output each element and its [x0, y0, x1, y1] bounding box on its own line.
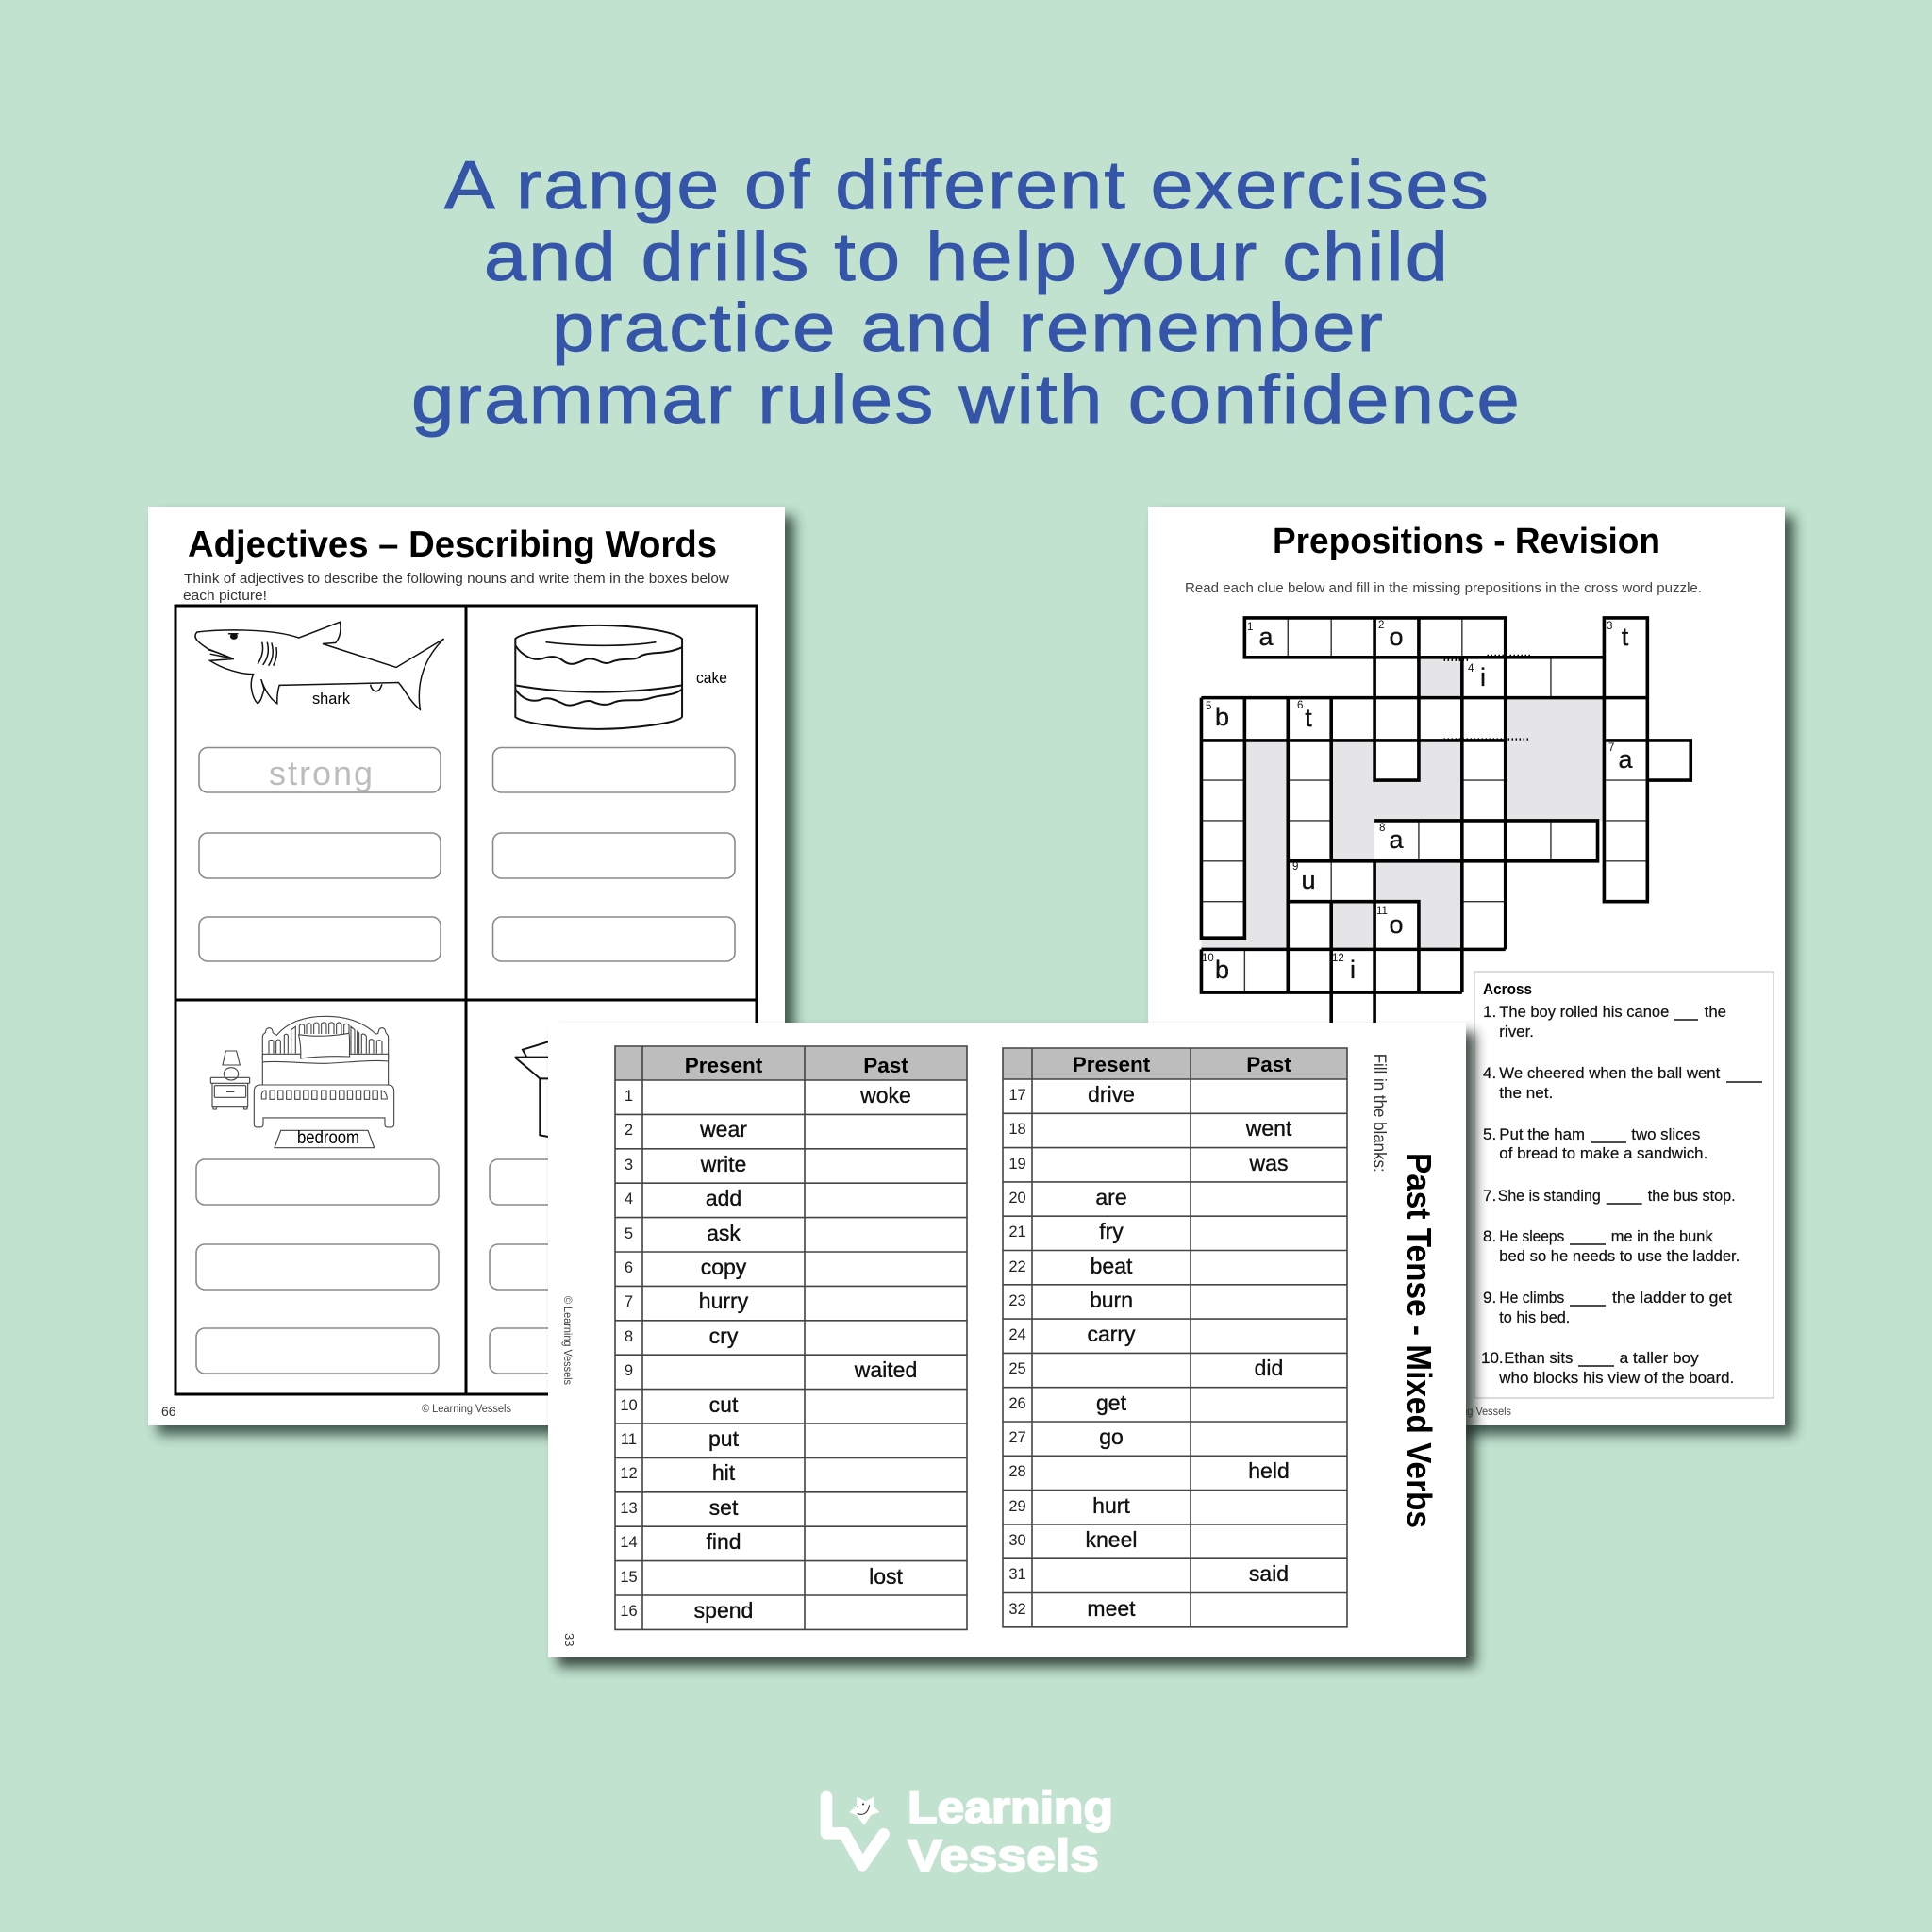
clue list: We cheered when the ball went	[1499, 1064, 1721, 1082]
table header: verbs 17 to 32: Past	[1246, 1053, 1291, 1076]
worksheet instructions: adjectives: each picture!	[183, 588, 267, 604]
verbs 17 to 32: went	[1245, 1116, 1292, 1141]
row numbers 1 to 16: 15	[620, 1569, 638, 1586]
crossword clue numbers: 3	[1607, 621, 1612, 632]
clue list: 4.	[1483, 1064, 1496, 1082]
verbs 1 to 16: ask	[707, 1221, 741, 1245]
verbs 1 to 16: wear	[699, 1117, 747, 1141]
verbs 1 to 16	[694, 1083, 917, 1623]
verbs 1 to 16: hit	[712, 1460, 736, 1485]
crossword clue numbers: 4	[1468, 663, 1474, 675]
icon: cake	[515, 625, 682, 729]
clue list: the ladder to get	[1612, 1289, 1732, 1307]
clue list: 8.	[1483, 1227, 1496, 1245]
crossword letters: o	[1389, 623, 1404, 651]
clue list: bed so he needs to use the ladder.	[1499, 1247, 1740, 1265]
verbs 17 to 32: said	[1249, 1561, 1289, 1586]
verbs 17 to 32: go	[1099, 1424, 1124, 1449]
clue list: He sleeps	[1499, 1227, 1564, 1245]
verbs 17 to 32	[1086, 1082, 1292, 1621]
verbs 1 to 16: find	[706, 1529, 741, 1554]
icon: open box	[515, 1041, 554, 1138]
crossword clue numbers: 9	[1292, 861, 1298, 873]
clue blanks	[1570, 1020, 1762, 1366]
row numbers 17 to 32: 29	[1008, 1498, 1026, 1515]
row numbers 17 to 32: 27	[1008, 1429, 1026, 1446]
row numbers 17 to 32: 19	[1008, 1156, 1026, 1173]
clue list: The boy rolled his canoe	[1499, 1003, 1669, 1021]
row numbers 17 to 32: 30	[1008, 1532, 1026, 1549]
logo wordmark: Learning	[908, 1782, 1113, 1832]
verbs 1 to 16: cut	[709, 1392, 739, 1417]
table: verbs 1 to 16	[615, 1046, 967, 1629]
crossword letters: i	[1350, 956, 1356, 984]
copyright: adjectives page: © Learning Vessels	[422, 1404, 511, 1415]
crossword clue numbers: 6	[1297, 700, 1303, 711]
panel: prepositions crossword worksheet	[1148, 507, 1794, 1435]
clue list	[1481, 1003, 1740, 1387]
crossword letters: i	[1480, 663, 1486, 691]
row numbers 17 to 32: 28	[1008, 1463, 1026, 1480]
verbs 17 to 32: carry	[1087, 1322, 1136, 1346]
crossword clue numbers	[1202, 620, 1614, 964]
verbs 17 to 32: burn	[1090, 1288, 1133, 1312]
clue list: two slices	[1631, 1125, 1700, 1143]
row numbers 17 to 32: 21	[1008, 1224, 1026, 1241]
crossword letters: o	[1389, 910, 1404, 939]
verbs 17 to 32: hurt	[1092, 1493, 1130, 1518]
verbs 1 to 16: write	[700, 1152, 746, 1176]
logo wordmark	[908, 1782, 1113, 1880]
clue list: the	[1705, 1003, 1726, 1021]
clue list: Put the ham	[1499, 1125, 1585, 1143]
row numbers 1 to 16: 12	[620, 1465, 638, 1482]
worksheet instructions: adjectives	[183, 571, 729, 604]
verbs 17 to 32: held	[1248, 1458, 1290, 1483]
clues box	[1474, 972, 1774, 1398]
verbs 1 to 16: woke	[859, 1083, 911, 1108]
table header: verbs 1 to 16: Present	[685, 1054, 763, 1077]
clue list: a taller boy	[1620, 1349, 1699, 1367]
verbs 1 to 16: waited	[854, 1357, 917, 1382]
row numbers 1 to 16: 9	[625, 1362, 633, 1379]
title	[411, 148, 1522, 438]
title: and drills to help your child	[484, 220, 1450, 295]
title: A range of different exercises	[444, 148, 1491, 224]
worksheet heading: prepositions: Prepositions - Revision	[1273, 522, 1660, 561]
crossword clue numbers: 12	[1332, 953, 1344, 964]
clue list: 7.	[1483, 1187, 1496, 1205]
row numbers 1 to 16: 1	[625, 1088, 633, 1105]
verbs 17 to 32: kneel	[1086, 1527, 1137, 1552]
crossword clue numbers: 2	[1378, 620, 1384, 631]
vertical instructions: fill in the blanks: Fill in the blanks:	[1370, 1054, 1389, 1173]
verbs 1 to 16: put	[708, 1426, 740, 1451]
clue list: river.	[1499, 1023, 1534, 1041]
verbs 1 to 16: add	[706, 1186, 741, 1210]
vertical copyright: © Learning Vessels	[561, 1296, 575, 1385]
icon: shark	[195, 622, 444, 709]
row numbers 1 to 16: 5	[625, 1225, 633, 1242]
vertical page number: 33: 33	[562, 1633, 576, 1646]
crossword letters	[1215, 623, 1633, 984]
crossword clue numbers: 8	[1379, 823, 1385, 834]
verbs 1 to 16: set	[709, 1495, 739, 1520]
crossword clue numbers: 10	[1202, 953, 1214, 964]
clue list: who blocks his view of the board.	[1498, 1369, 1734, 1387]
row numbers 1 to 16: 13	[620, 1500, 638, 1517]
row numbers 17 to 32: 22	[1008, 1258, 1026, 1275]
verbs 17 to 32: did	[1255, 1356, 1283, 1380]
crossword letters: t	[1305, 704, 1312, 732]
row numbers 17 to 32: 31	[1008, 1566, 1026, 1583]
clue list: 5.	[1483, 1125, 1496, 1143]
clue list: She is standing	[1498, 1187, 1601, 1205]
logo wordmark: Vessels	[908, 1830, 1099, 1880]
logo: Learning Vessels	[826, 1782, 1113, 1880]
verbs 1 to 16: hurry	[699, 1289, 749, 1313]
label: cake: cake	[696, 669, 727, 687]
crossword letters: u	[1301, 866, 1316, 894]
clue list: to his bed.	[1499, 1308, 1570, 1326]
row numbers 1 to 16: 7	[625, 1293, 633, 1310]
title: practice and remember	[552, 291, 1385, 366]
crossword clue numbers: 5	[1206, 701, 1211, 712]
clue list: of bread to make a sandwich.	[1499, 1144, 1707, 1162]
worksheet instructions: prepositions: Read each clue below and fill in the missing prepositions in the cross word puzzle.	[1185, 580, 1702, 596]
clue list: me in the bunk	[1611, 1227, 1713, 1245]
table header: verbs 17 to 32: Present	[1073, 1053, 1151, 1076]
row numbers 1 to 16	[620, 1088, 638, 1620]
crossword clue numbers: 1	[1247, 622, 1253, 633]
row numbers 1 to 16: 8	[625, 1328, 633, 1345]
clue list: 9.	[1483, 1289, 1496, 1307]
crossword letters: a	[1618, 745, 1633, 774]
adjectives grid	[175, 606, 757, 1394]
crossword grid	[1201, 618, 1690, 1029]
row numbers 17 to 32: 17	[1008, 1087, 1026, 1104]
row numbers 17 to 32	[1008, 1087, 1026, 1618]
label: bedroom: bedroom	[297, 1128, 359, 1148]
row numbers 17 to 32: 24	[1008, 1326, 1026, 1343]
row numbers 1 to 16: 2	[625, 1122, 633, 1139]
verbs 17 to 32: was	[1249, 1151, 1288, 1175]
verbs 1 to 16: lost	[869, 1564, 904, 1589]
row numbers 1 to 16: 10	[620, 1397, 638, 1414]
verbs 1 to 16: copy	[701, 1255, 747, 1279]
crossword letters: a	[1258, 623, 1274, 651]
row numbers 1 to 16: 11	[621, 1431, 637, 1448]
panel: past tense worksheet	[548, 1023, 1475, 1667]
table: verbs 17 to 32	[1003, 1048, 1347, 1627]
row numbers 17 to 32: 32	[1008, 1601, 1026, 1618]
table header: verbs 17 to 32	[1073, 1053, 1291, 1076]
clues heading: Across	[1483, 980, 1532, 998]
panel: adjectives worksheet	[148, 507, 794, 1435]
crossword clue numbers: 7	[1608, 742, 1614, 754]
clue list: He climbs	[1499, 1289, 1564, 1307]
clue list: the net.	[1499, 1084, 1553, 1102]
label: shark: shark	[312, 690, 350, 708]
row numbers 1 to 16: 6	[625, 1259, 633, 1276]
row numbers 17 to 32: 20	[1008, 1190, 1026, 1207]
clue list: the bus stop.	[1648, 1187, 1736, 1205]
crossword clue numbers: 11	[1376, 906, 1388, 917]
row numbers 17 to 32: 23	[1008, 1292, 1026, 1309]
verbs 17 to 32: meet	[1087, 1596, 1136, 1621]
clue list: 10.	[1481, 1349, 1504, 1367]
icon: bed and nightstand	[210, 1016, 394, 1127]
crossword letters: b	[1215, 956, 1229, 984]
row numbers 1 to 16: 16	[620, 1603, 638, 1620]
verbs 17 to 32: get	[1096, 1391, 1127, 1415]
clue list: Ethan sits	[1504, 1349, 1573, 1367]
clue list: 1.	[1483, 1003, 1496, 1021]
row numbers 1 to 16: 4	[625, 1191, 633, 1208]
vertical heading: past tense: Past Tense - Mixed Verbs	[1400, 1153, 1439, 1528]
verbs 17 to 32: fry	[1099, 1219, 1124, 1243]
row numbers 1 to 16: 3	[625, 1157, 633, 1174]
table header: verbs 1 to 16	[685, 1054, 908, 1077]
verbs 1 to 16: spend	[694, 1598, 753, 1623]
verbs 17 to 32: drive	[1088, 1082, 1135, 1107]
row numbers 17 to 32: 26	[1008, 1395, 1026, 1412]
crossword letters: a	[1389, 825, 1404, 854]
verbs 1 to 16: cry	[709, 1324, 739, 1348]
title: grammar rules with confidence	[411, 362, 1522, 438]
verbs 17 to 32: are	[1095, 1185, 1127, 1209]
logo mark	[826, 1796, 884, 1865]
table header: verbs 1 to 16: Past	[863, 1054, 908, 1077]
row numbers 17 to 32: 25	[1008, 1360, 1026, 1377]
row numbers 1 to 16: 14	[620, 1534, 638, 1551]
page number: 66: 66	[161, 1404, 176, 1419]
copyright: prepositions page: © Learning Vessels	[1423, 1407, 1511, 1418]
answer boxes	[196, 747, 735, 1374]
row numbers 17 to 32: 18	[1008, 1121, 1026, 1138]
worksheet instructions: adjectives: Think of adjectives to describe the following nouns and write them in the boxes below	[184, 571, 729, 587]
crossword letters: t	[1622, 623, 1629, 651]
verbs 17 to 32: beat	[1091, 1254, 1133, 1278]
traced word: strong: strong	[269, 754, 373, 792]
worksheet heading: adjectives: Adjectives – Describing Words	[188, 525, 717, 565]
crossword letters: b	[1215, 703, 1229, 731]
